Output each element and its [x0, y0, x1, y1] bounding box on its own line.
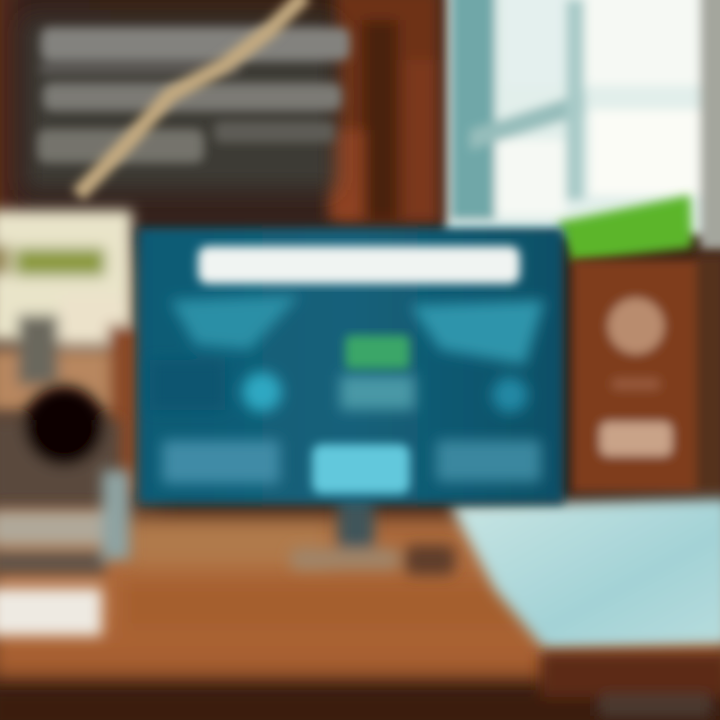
heading line 1: [42, 28, 350, 60]
background wall: [0, 0, 490, 520]
window: [445, 0, 720, 250]
round emblem: [608, 298, 664, 354]
monitor screen: [138, 228, 564, 504]
screen title bar: [198, 246, 520, 284]
monitor: [138, 228, 564, 504]
green box on cabinet: [558, 195, 692, 262]
cabinet panel: [572, 255, 720, 495]
heading line 3: [38, 130, 203, 162]
screen imagery: [150, 295, 545, 413]
diagonal chart line: [78, 0, 305, 195]
right text block: [436, 440, 541, 482]
left shelf: [0, 210, 138, 495]
left text block: [162, 440, 280, 484]
green chart: [345, 335, 410, 369]
desk surface: [0, 515, 720, 680]
green strip: [15, 248, 105, 276]
wall board with text: [25, 20, 350, 190]
desk front edge: [0, 652, 720, 720]
stacked books: [0, 470, 130, 636]
dark round object: [0, 386, 120, 505]
heading line 2: [44, 84, 342, 110]
screen button: [312, 444, 410, 494]
glass desk surface: [450, 498, 720, 650]
monitor stand: [290, 495, 455, 575]
cabinet label: [600, 422, 672, 456]
wooden column: [328, 0, 440, 225]
